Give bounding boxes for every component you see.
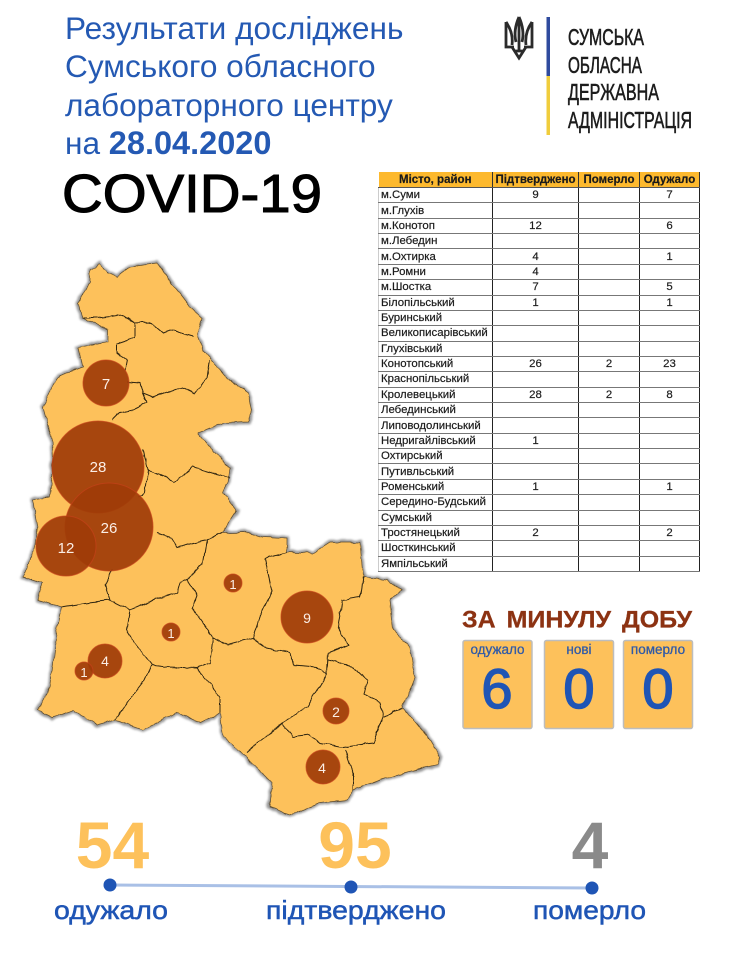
map shadow [23, 263, 440, 815]
total labels [54, 895, 646, 925]
data table: Кролевецький [381, 389, 455, 401]
bubble labels [58, 376, 340, 776]
data table: Роменський [381, 481, 444, 493]
totals [54, 808, 646, 925]
bubble labels: 28 [90, 459, 106, 476]
data table: 1 [532, 481, 539, 493]
card: recovered: одужало [470, 642, 525, 657]
data table: 2 [666, 527, 673, 539]
title: Сумського обласного [65, 48, 376, 84]
data table: Підтверджено [495, 174, 576, 186]
data table: Сумський [381, 512, 432, 524]
bubble labels: 4 [101, 653, 109, 669]
data table: 1 [532, 435, 539, 447]
card: deaths: померло [631, 642, 685, 657]
bubble labels: 7 [102, 376, 110, 393]
total labels: померло [533, 895, 646, 925]
data table: Охтирський [381, 450, 443, 462]
data table: 8 [666, 389, 673, 401]
data table: 23 [663, 358, 676, 370]
data table: 1 [666, 297, 673, 309]
logo: Sumy regional administration [506, 17, 692, 135]
total labels: одужало [54, 895, 168, 925]
icon: trident [506, 17, 532, 58]
total numbers: 4 [572, 808, 609, 882]
data table: Липоводолинський [381, 420, 481, 432]
case bubbles [36, 360, 349, 784]
data table: 7 [666, 189, 673, 201]
card: new: нові [566, 642, 592, 657]
data table: Ямпільський [381, 558, 448, 570]
bubble labels: 26 [101, 520, 117, 537]
data table: 2 [606, 358, 612, 370]
card: deaths: 0 [642, 657, 674, 720]
data table: Великописарівський [381, 327, 488, 339]
data table: Путивльський [381, 466, 454, 478]
data table: 1 [532, 297, 539, 309]
data table: 12 [529, 220, 542, 232]
data table: Середино-Будський [381, 496, 486, 508]
total numbers [76, 808, 609, 882]
data table: 6 [666, 220, 673, 232]
data table: Шосткинський [381, 542, 456, 554]
data table: 2 [606, 389, 612, 401]
title: лабораторного центру [65, 87, 393, 123]
map fill [23, 263, 440, 815]
data table: 28 [529, 389, 542, 401]
card: new [544, 640, 614, 728]
card: deaths [624, 640, 692, 728]
bubble labels: 4 [318, 760, 326, 776]
title: Результати досліджень [65, 10, 403, 46]
bubble labels: 1 [80, 665, 88, 680]
data table: 7 [532, 281, 539, 293]
title: на 28.04.2020 [65, 125, 271, 161]
data table [378, 172, 700, 572]
data table: 1 [666, 251, 673, 263]
bubble labels: 2 [332, 704, 340, 720]
map: Sumy oblast [23, 263, 440, 815]
divider: flag colours [546, 17, 550, 135]
data table: 5 [666, 281, 673, 293]
data table: 2 [532, 527, 539, 539]
total labels: підтверджено [266, 895, 446, 925]
data table: Лебединський [381, 404, 456, 416]
data table: 9 [532, 189, 539, 201]
heading: COVID-19: COVID-19 [62, 164, 322, 224]
data table: м.Охтирка [381, 251, 436, 263]
bubble labels: 12 [58, 540, 74, 557]
data table: м.Шостка [381, 281, 431, 293]
data table: м.Конотоп [381, 220, 435, 232]
data table: Буринський [381, 312, 442, 324]
data table: Недригайлівський [381, 435, 476, 447]
card: recovered [463, 640, 532, 728]
logo text: ОБЛАСНА [568, 52, 642, 78]
card: recovered: 6 [481, 657, 513, 720]
data table: Одужало [644, 174, 695, 186]
bubble labels: 1 [167, 626, 175, 641]
data table: м.Лебедин [381, 235, 437, 247]
district borders [62, 315, 403, 790]
data table: Конотопський [381, 358, 453, 370]
data table: Померло [584, 174, 634, 186]
logo text: СУМСЬКА [568, 24, 644, 50]
data table: Глухівський [381, 343, 442, 355]
data table: 1 [666, 481, 673, 493]
data table: Тростянецький [381, 527, 460, 539]
data table: Місто, район [399, 174, 472, 186]
bubble labels: 9 [303, 610, 311, 626]
card: new: 0 [563, 657, 595, 720]
data table: м.Ромни [381, 266, 426, 278]
data table: 4 [532, 251, 539, 263]
data table: 4 [532, 266, 539, 278]
total numbers: 54 [76, 808, 149, 882]
data table: м.Глухів [381, 205, 424, 217]
total numbers: 95 [318, 808, 392, 882]
data table: Білопільський [381, 297, 455, 309]
data table: Краснопільський [381, 373, 469, 385]
heading: last 24 hours: ЗА МИНУЛУ ДОБУ [462, 606, 693, 634]
bubble labels: 1 [229, 577, 237, 592]
data table: м.Суми [381, 189, 420, 201]
timeline [104, 878, 598, 894]
data table: 26 [529, 358, 542, 370]
title [65, 10, 403, 161]
logo text [568, 24, 692, 133]
logo text: ДЕРЖАВНА [568, 79, 659, 105]
